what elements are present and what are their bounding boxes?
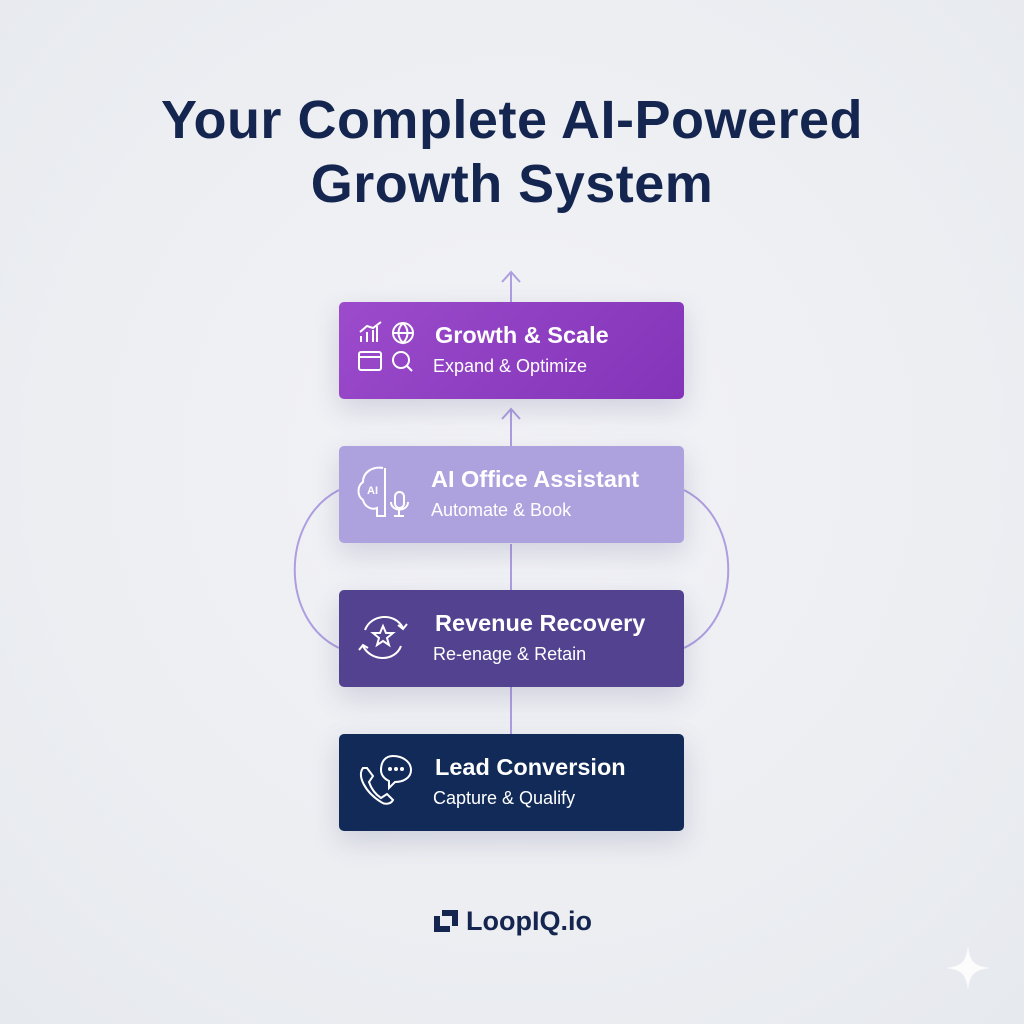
title xyxy=(161,90,863,214)
icon: brain mic: AI xyxy=(367,485,378,497)
sparkle xyxy=(948,948,988,988)
title: Growth System xyxy=(311,154,713,214)
box: Revenue Recovery xyxy=(339,590,684,687)
icon: brain mic xyxy=(358,466,409,517)
logo: LoopIQ.io xyxy=(466,906,592,936)
icon: logo mark xyxy=(434,910,458,932)
icon: growth icons xyxy=(358,321,414,372)
box: Growth & Scale: Expand & Optimize xyxy=(433,356,587,376)
box: Lead Conversion: Capture & Qualify xyxy=(433,788,575,808)
box: AI Office Assistant: AI Office Assistant xyxy=(431,466,639,492)
box: AI Office Assistant: Automate & Book xyxy=(431,500,571,520)
icon: star cycle xyxy=(358,616,408,659)
box: Lead Conversion xyxy=(339,734,684,831)
title: Your Complete AI-Powered xyxy=(161,90,863,150)
box: Growth & Scale: Growth & Scale xyxy=(435,322,609,348)
box: Growth & Scale xyxy=(339,302,684,399)
box: Revenue Recovery: Revenue Recovery xyxy=(435,610,645,636)
box: Lead Conversion: Lead Conversion xyxy=(435,754,626,780)
box: Revenue Recovery: Re-enage & Retain xyxy=(433,644,586,664)
box: AI Office Assistant xyxy=(339,446,684,543)
icon: phone chat xyxy=(360,755,412,805)
